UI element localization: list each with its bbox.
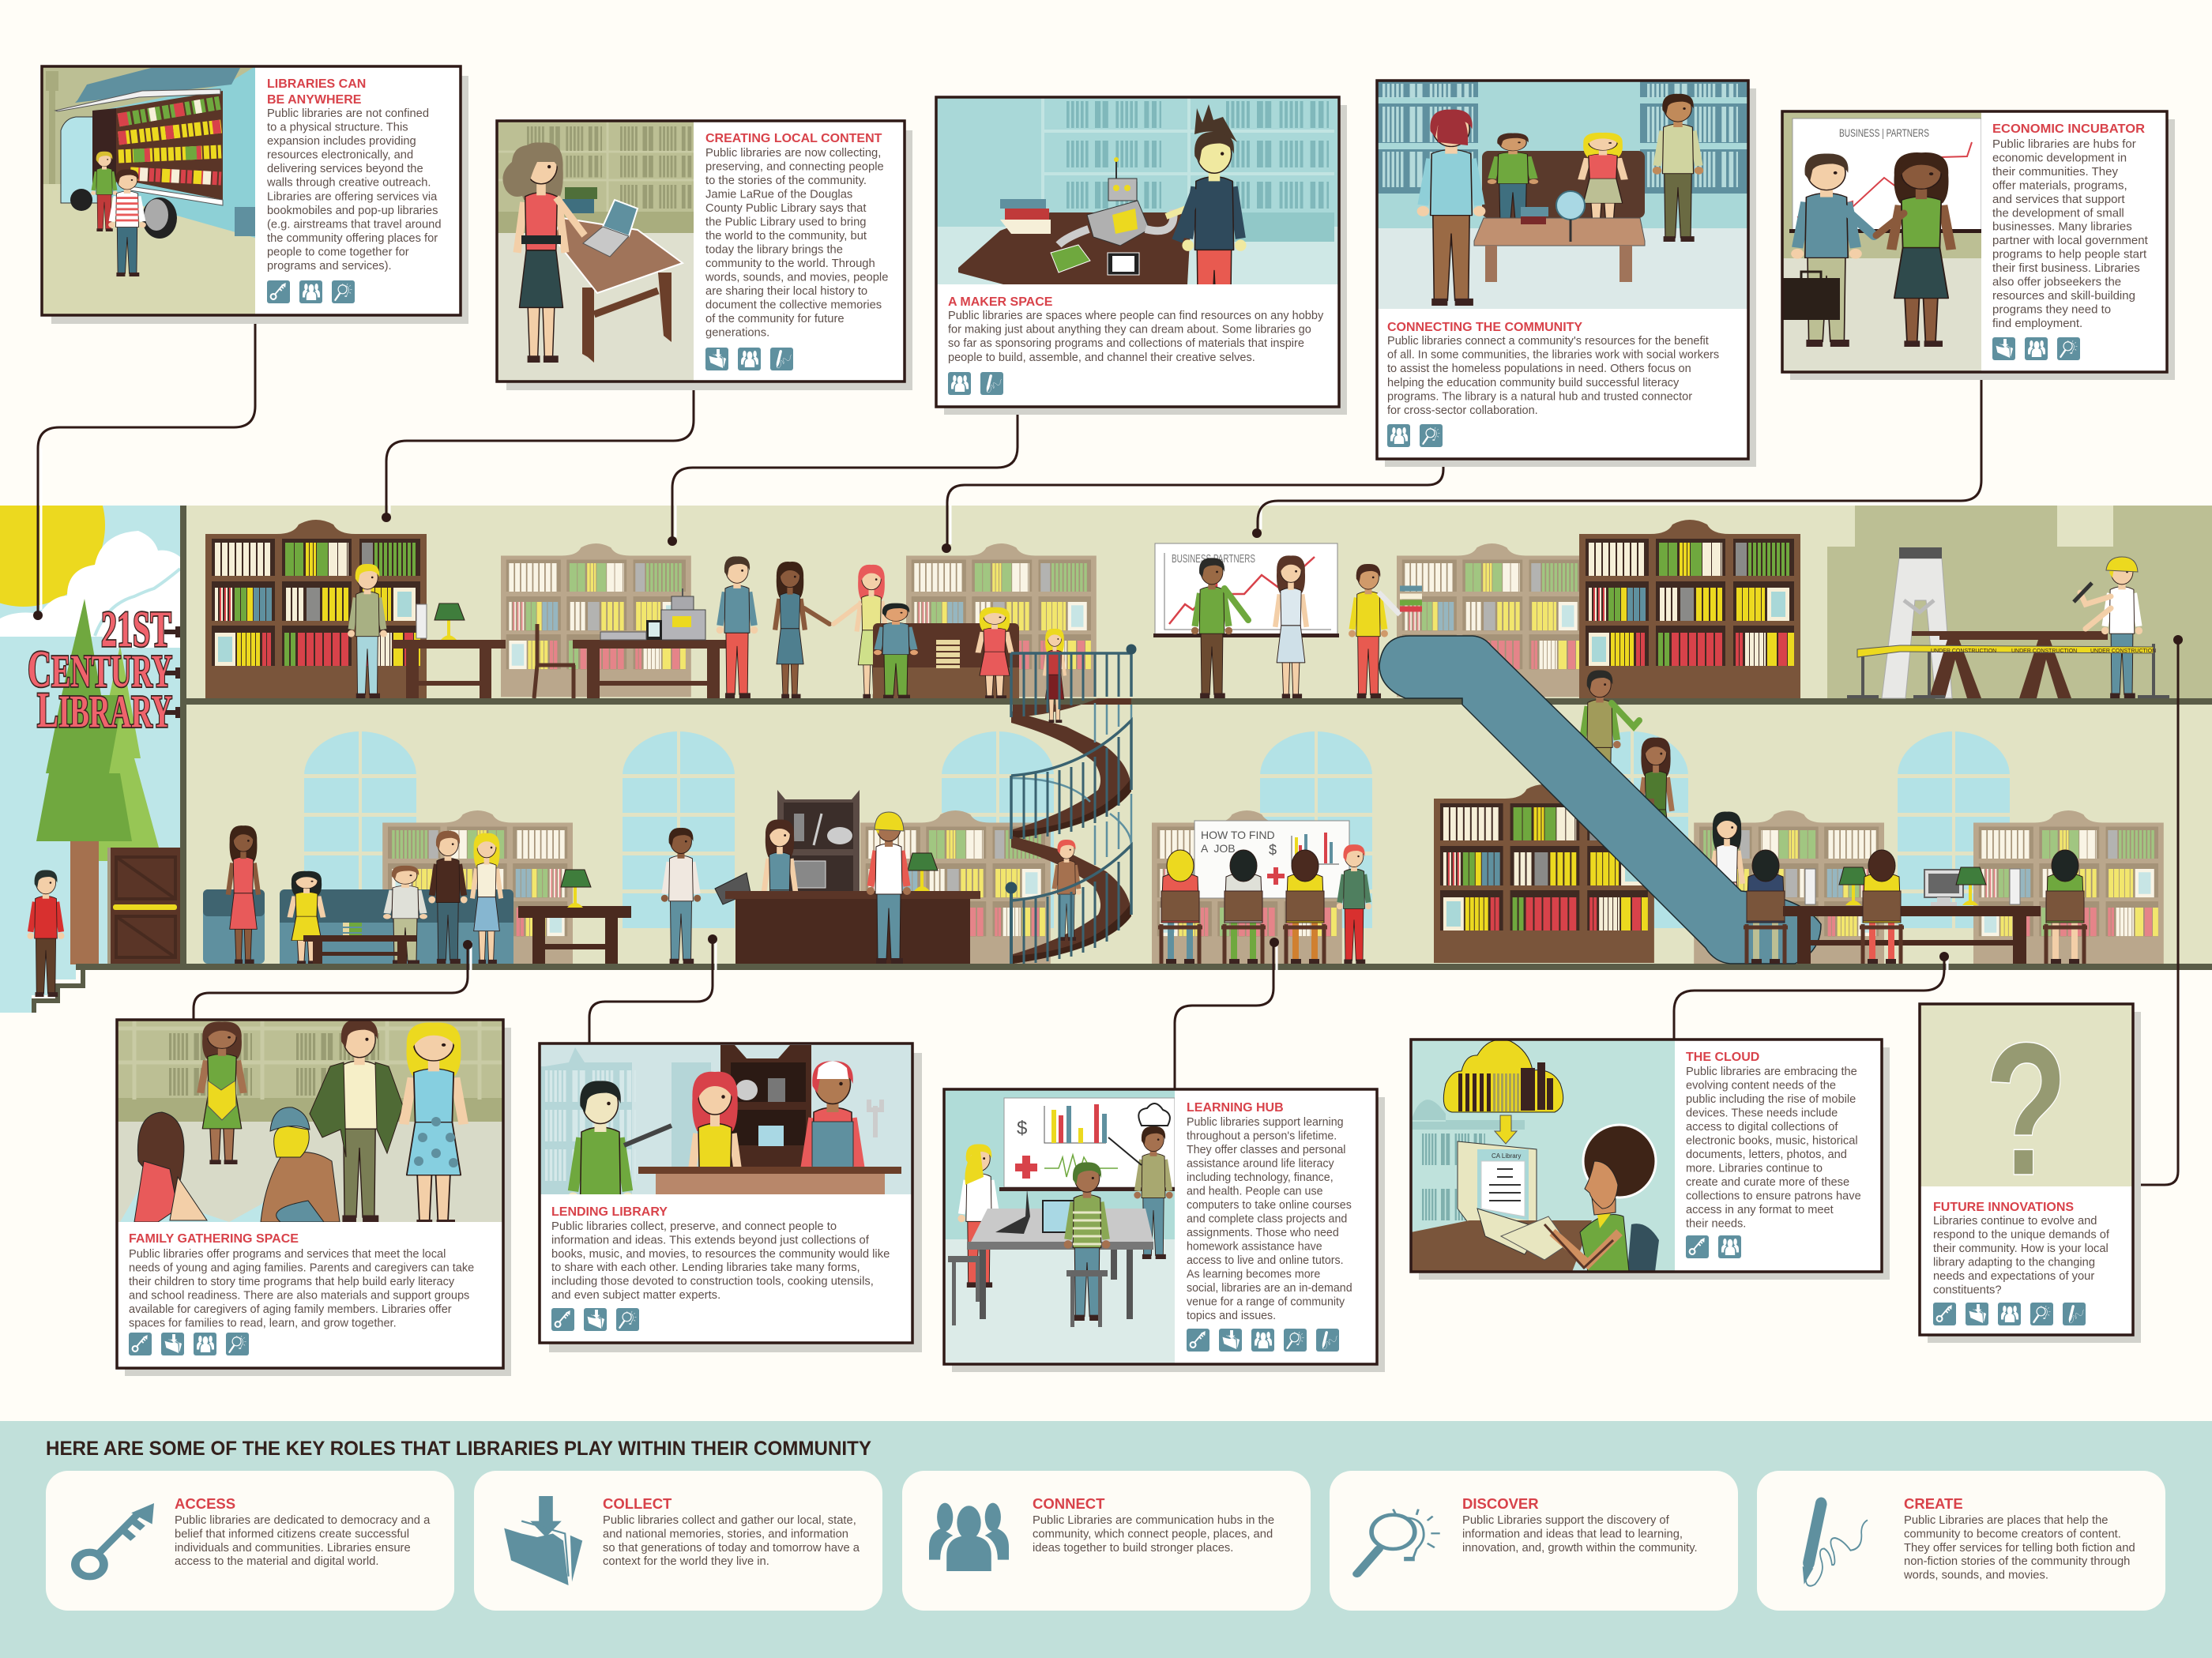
escalator: [1379, 636, 1821, 964]
role icons: [1187, 1329, 1339, 1352]
floors and left wall: [76, 506, 2212, 970]
body text: available for caregivers of aging family members. Libraries offer: [129, 1303, 452, 1316]
card text: ideas together to build stronger places.: [1033, 1542, 1233, 1555]
entrance steps: [34, 970, 83, 1013]
connector: libraries can be anywhere: [33, 315, 255, 620]
classroom: whiteboard: A JOB: [1201, 842, 1236, 855]
heading: A MAKER SPACE: [948, 295, 1053, 309]
body text: Public libraries collect, preserve, and connect people to: [551, 1220, 837, 1233]
icon: discover: [2057, 337, 2080, 360]
heading: CREATING LOCAL CONTENT: [705, 132, 882, 145]
card: discover: [1330, 1471, 1738, 1611]
role icons: [551, 1308, 639, 1331]
connector: future innovations: [2133, 635, 2183, 1185]
card heading: ACCESS: [175, 1495, 235, 1512]
body text: throughout a person's lifetime.: [1187, 1130, 1337, 1143]
body text: access to digital collections of: [1686, 1121, 1838, 1134]
body text: Public libraries are spaces where people can find resources on any hobby: [948, 310, 1324, 322]
body text: Public libraries are embracing the: [1686, 1066, 1857, 1078]
classroom: whiteboard: HOW TO FIND: [1201, 829, 1275, 841]
reading woman: [228, 825, 258, 964]
construction area: ladder, table, tape, worker: [1847, 547, 2169, 698]
heading: FUTURE INNOVATIONS: [1933, 1201, 2074, 1214]
body text: They offer classes and personal: [1187, 1144, 1345, 1156]
icon: folder: [504, 1496, 582, 1585]
body text: programs they need to: [1992, 303, 2111, 316]
illustration: business handshake: BUSINESS | PARTNERS: [1839, 126, 1929, 139]
card text: so that generations of today and tomorrow have a: [603, 1542, 860, 1555]
body text: assistance around life literacy: [1187, 1157, 1334, 1171]
body text: walls through creative outreach.: [266, 177, 431, 190]
heading: BE ANYWHERE: [267, 93, 362, 107]
body text: of the community for future: [705, 313, 845, 325]
connector: family gathering space: [194, 940, 472, 1020]
card text: community to become creators of content.: [1904, 1528, 2121, 1540]
icon: connect: [299, 280, 322, 303]
woman shaking hands: [1275, 555, 1307, 698]
card text: non-fiction stories of the community through: [1904, 1555, 2130, 1568]
dark shelf lower floor: [1434, 784, 1654, 963]
man in green jacket: [1191, 558, 1232, 698]
heading: CONNECTING THE COMMUNITY: [1387, 321, 1582, 334]
icon: discover: [1284, 1329, 1307, 1352]
person climbing steps: [27, 870, 65, 997]
boy with book stack: [1349, 564, 1422, 698]
body text: and services that support: [1992, 193, 2125, 206]
illustration: classroom with laptops: [945, 1090, 1175, 1363]
icon: access: [551, 1308, 574, 1331]
icon: access: [1187, 1329, 1209, 1352]
body text: (e.g. airstreams that travel around: [267, 218, 442, 231]
icon: pen: [1803, 1504, 1868, 1586]
body text: assignments. Those who need: [1187, 1227, 1339, 1239]
role icons: [948, 372, 1003, 395]
role icons: [129, 1333, 249, 1355]
card heading: CONNECT: [1033, 1495, 1105, 1512]
body text: respond to the unique demands of: [1933, 1228, 2110, 1242]
panel: libraries can be anywhere: [42, 66, 468, 324]
illustration: family reading together: [118, 1021, 502, 1222]
icon: access: [267, 280, 290, 303]
body text: computers to take online courses: [1187, 1199, 1352, 1212]
body text: documents, letters, photos, and: [1686, 1149, 1847, 1161]
whiteboard: business partners: [1153, 543, 1339, 637]
body text: are sharing their local history to: [705, 285, 867, 298]
body text: access in any format to meet: [1686, 1204, 1834, 1216]
body text: including technology, finance,: [1187, 1171, 1334, 1184]
riders behind escalator: [1578, 671, 1743, 956]
icon: collect: [1992, 337, 2015, 360]
card text: Public Libraries support the discovery of: [1462, 1514, 1670, 1527]
panel: family gathering space: [117, 1019, 511, 1376]
body text: programs and services).: [267, 260, 392, 273]
body text: for cross-sector collaboration.: [1387, 404, 1538, 417]
icon: connect: [1387, 424, 1410, 447]
icon: discover: [616, 1308, 639, 1331]
title: 21st Century Library: 21ST: [101, 601, 171, 658]
body text: Public libraries are now collecting,: [705, 147, 881, 160]
man at computer: [348, 564, 387, 698]
heading: THE CLOUD: [1686, 1051, 1759, 1064]
role icons: [1992, 337, 2080, 360]
child on stairs, upper: [1044, 629, 1065, 723]
card text: Public libraries collect and gather our local, state,: [603, 1514, 856, 1527]
body text: and health. People can use: [1187, 1185, 1322, 1198]
illustration: lending counter: [540, 1044, 912, 1194]
title: 21st Century Library: [28, 601, 180, 738]
seated boy: [383, 866, 427, 964]
body text: and school readiness. There are also materials and support groups: [129, 1289, 469, 1303]
icon: create: [980, 372, 1003, 395]
connector: maker space: [668, 407, 1018, 546]
icon: connect: [194, 1333, 216, 1355]
icon: discover: [2030, 1303, 2053, 1325]
body text: including those devoted to construction tools, cooking utensils,: [551, 1276, 874, 1288]
body text: people to come together for: [267, 246, 409, 259]
panel: learning hub: [944, 1089, 1385, 1372]
body text: evolving content needs of the: [1686, 1079, 1836, 1092]
body text: to the stories of the community.: [705, 175, 867, 187]
body text: also offer jobseekers the: [1992, 275, 2121, 288]
computer table with patrons: [1744, 850, 2087, 964]
role icons: [705, 348, 793, 370]
tool cabinet: [777, 790, 860, 891]
body text: document the collective memories: [705, 299, 882, 312]
body text: partner with local government: [1992, 234, 2149, 247]
body text: preserving, and connecting people: [705, 160, 884, 174]
band heading: HERE ARE SOME OF THE KEY ROLES THAT LIBRARIES PLAY WITHIN THEIR COMMUNITY: [46, 1438, 871, 1460]
connector: the cloud: [1674, 952, 1949, 1040]
heading: LEARNING HUB: [1187, 1101, 1284, 1115]
role icons: [1933, 1303, 2086, 1325]
panel: lending library: [540, 1043, 922, 1352]
construction area: ladder, table, tape, worker: UNDER CONSTRUCTION: [1931, 649, 1996, 654]
body text: access to live and online tutors.: [1187, 1254, 1344, 1267]
body text: Libraries are offering services via: [267, 190, 438, 203]
role icons: [1387, 424, 1443, 447]
body text: find employment.: [1992, 317, 2082, 330]
card: connect: [902, 1471, 1311, 1611]
body text: Public libraries connect a community's resources for the benefit: [1387, 335, 1709, 348]
body text: constituents?: [1933, 1284, 2002, 1297]
role icons: [1686, 1235, 1741, 1258]
upper bookshelves: [205, 520, 1800, 698]
body text: Public libraries offer programs and services that meet the local: [129, 1248, 446, 1261]
body text: offer materials, programs,: [1992, 179, 2127, 192]
whiteboard: business partners: BUSINESS PARTNERS: [1172, 552, 1255, 566]
panel: creating local content: [497, 121, 912, 390]
laptop handed over: [715, 873, 750, 904]
panel: connecting the community: [1377, 81, 1756, 467]
body text: generations.: [705, 326, 769, 340]
icon: collect: [705, 348, 728, 370]
body text: the development of small: [1992, 206, 2124, 220]
door: [107, 848, 180, 964]
card text: Public Libraries are communication hubs in the: [1033, 1514, 1274, 1527]
maker table with chair and robot: [534, 588, 733, 698]
lower light bookshelves: [382, 810, 2164, 964]
card text: Public Libraries are places that help the: [1904, 1514, 2108, 1527]
card text: access to the material and digital world.: [175, 1555, 378, 1568]
icon: connect: [1998, 1303, 2021, 1325]
sky with sun and clouds: [0, 506, 180, 1013]
illustration: cloud library and computer: [1413, 1041, 1675, 1270]
card text: and national memories, stories, and information: [603, 1528, 848, 1540]
icon: connect: [2025, 337, 2048, 360]
body text: more. Libraries continue to: [1686, 1162, 1823, 1175]
icon: collect: [161, 1333, 184, 1355]
body text: of all. In some communities, the libraries work with social workers: [1387, 348, 1719, 362]
body text: social, libraries are an in-demand: [1187, 1282, 1352, 1295]
body text: County Public Library says that: [705, 202, 867, 215]
construction area: ladder, table, tape, worker: UNDER CONSTRUCTION: [2090, 649, 2156, 654]
body text: community to the world. Through: [705, 258, 875, 270]
librarian: [764, 819, 796, 964]
icon: create: [1316, 1329, 1339, 1352]
body text: for making just about anything they can dream about. Some libraries go: [948, 323, 1311, 336]
body text: Public libraries are hubs for: [1992, 137, 2136, 151]
body text: electronic books, music, historical: [1686, 1134, 1858, 1148]
body text: economic development in: [1992, 151, 2127, 164]
card text: Public libraries are dedicated to democracy and a: [175, 1514, 431, 1527]
panel: a maker space: [936, 97, 1347, 415]
body text: their needs.: [1686, 1217, 1746, 1231]
body text: Public libraries are not confined: [267, 107, 429, 120]
connector: connecting the community: [942, 459, 1443, 553]
maker man: [717, 556, 758, 698]
card text: They offer services for telling both fiction and: [1904, 1542, 2135, 1555]
heading: FAMILY GATHERING SPACE: [129, 1232, 299, 1246]
body text: and complete class projects and: [1187, 1212, 1347, 1226]
card: create: [1757, 1471, 2165, 1611]
lower floor: seating area: [203, 889, 514, 964]
card: access: [46, 1471, 454, 1611]
woman handing book: [775, 562, 805, 698]
icon: access: [1933, 1303, 1956, 1325]
body text: Jamie LaRue of the Douglas: [705, 188, 852, 201]
illustration: bookmobile: [43, 68, 255, 314]
body text: people to build, assemble, and channel their creative selves.: [948, 352, 1255, 364]
icon: access: [1686, 1235, 1709, 1258]
icon: access: [129, 1333, 152, 1355]
body text: their communities. They: [1992, 165, 2118, 179]
icon: connect: [948, 372, 971, 395]
card text: words, sounds, and movies.: [1903, 1570, 2048, 1582]
heading: ECONOMIC INCUBATOR: [1992, 122, 2145, 136]
body text: to assist the homeless populations in need. Others focus on: [1387, 363, 1691, 375]
standing man and woman: [428, 831, 501, 964]
body text: so far as sponsoring programs and collections of materials that inspire: [948, 337, 1304, 350]
card heading: DISCOVER: [1462, 1495, 1539, 1512]
illustration: community meeting on sofa: [1378, 82, 1747, 309]
card text: community, which connect people, places, and: [1033, 1528, 1273, 1540]
building wall: [180, 506, 2212, 964]
body text: to share with each other. Lending libraries take many forms,: [551, 1261, 860, 1274]
panel: the cloud: [1411, 1040, 1890, 1280]
body text: their first business. Libraries: [1992, 261, 2140, 275]
illustration: business handshake: [1784, 112, 1981, 371]
connector: creating local content: [382, 382, 694, 522]
body text: spaces for families to read, learn, and grow together.: [129, 1317, 397, 1330]
side table with lamp: [518, 870, 631, 964]
connector: learning hub: [1175, 938, 1279, 1089]
body text: collections to ensure patrons have: [1686, 1190, 1861, 1203]
body text: their community. How is your local: [1933, 1243, 2109, 1255]
coffee table: [303, 923, 416, 964]
illustration: woman on laptop: [498, 122, 694, 381]
boy returning laptop: [661, 828, 701, 964]
body text: needs and expectations of your: [1933, 1270, 2094, 1283]
body text: Public libraries support learning: [1187, 1116, 1344, 1129]
icon: connect: [738, 348, 761, 370]
icon: discover: [1420, 424, 1443, 447]
icon: create: [2063, 1303, 2086, 1325]
construction worker at desk: [867, 812, 911, 964]
classroom: whiteboard: [1194, 821, 1349, 898]
card text: innovation, and, growth within the community.: [1462, 1542, 1698, 1555]
icon: create: [770, 348, 793, 370]
connector: lending library: [589, 934, 717, 1043]
role icons: [267, 280, 355, 303]
illustration: question mark: ?: [1984, 1004, 2068, 1216]
icon: people: [929, 1503, 1009, 1571]
card: collect: [474, 1471, 882, 1611]
body text: books, music, and movies, to resources the community would like: [551, 1248, 890, 1261]
panel: future innovations: [1920, 1004, 2141, 1343]
card text: individuals and communities. Libraries ensure: [175, 1542, 411, 1555]
body text: bookmobiles and pop-up libraries: [267, 205, 438, 217]
icon: magnifier and bulb: [1357, 1509, 1440, 1573]
title: 21st Century Library: CENTURY: [28, 641, 172, 698]
card heading: COLLECT: [603, 1495, 672, 1512]
class attendees and teacher: [1158, 844, 1371, 964]
lower windows: [304, 731, 2010, 928]
handshake arms: [1224, 588, 1248, 620]
body text: the world to the community, but: [705, 230, 867, 242]
body text: resources and skill-building: [1992, 289, 2135, 303]
body text: expansion includes providing: [267, 135, 416, 148]
connector: economic incubator: [1252, 372, 1981, 538]
icon: discover: [226, 1333, 249, 1355]
body text: information and ideas. This extends beyond just collections of: [551, 1234, 870, 1246]
body text: public including the rise of mobile: [1686, 1093, 1856, 1106]
body text: create and curate more of these: [1686, 1176, 1849, 1189]
trees: [36, 599, 159, 964]
card text: context for the world they live in.: [603, 1555, 769, 1568]
sofa with two seated readers: [873, 603, 1019, 698]
construction area: ladder, table, tape, worker: UNDER CONSTRUCTION: [2011, 649, 2077, 654]
body text: the Public Library used to bring: [705, 216, 867, 229]
classroom: whiteboard: $: [1269, 842, 1277, 858]
body text: to a physical structure. This: [267, 121, 408, 134]
bottom band: key roles: [0, 1421, 2212, 1658]
icon: collect: [584, 1308, 607, 1331]
body text: programs. The library is a natural hub and trusted connector: [1387, 390, 1692, 403]
body text: As learning becomes more: [1187, 1268, 1320, 1281]
card heading: CREATE: [1904, 1495, 1963, 1512]
icon: discover: [332, 280, 355, 303]
body text: devices. These needs include: [1686, 1107, 1838, 1120]
body text: programs to help people start: [1992, 248, 2147, 261]
body text: resources electronically, and: [267, 149, 413, 162]
child on stairs, lower: [1051, 840, 1082, 941]
body text: the community offering places for: [267, 232, 438, 245]
icon: collect: [1966, 1303, 1988, 1325]
title: 21st Century Library: LIBRARY: [37, 682, 172, 738]
red-haired woman: [804, 565, 886, 698]
icon: connect: [1718, 1235, 1741, 1258]
spiral staircase railings: [1005, 645, 1136, 964]
scene: library building cross-section: [0, 444, 2212, 1013]
heading: LENDING LIBRARY: [551, 1205, 668, 1219]
body text: needs of young and aging families. Parents and caregivers can take: [129, 1261, 474, 1275]
body text: and even subject matter experts.: [551, 1289, 720, 1302]
illustration: classroom with laptops: $: [1017, 1118, 1027, 1139]
icon: collect: [1219, 1329, 1242, 1352]
body text: businesses. Many libraries: [1992, 220, 2132, 234]
body text: helping the education community build successful literacy: [1387, 377, 1680, 389]
body text: Libraries continue to evolve and: [1933, 1215, 2097, 1228]
spiral staircase treads: [1011, 698, 1131, 964]
body text: their children to story time programs that help build early literacy: [129, 1276, 455, 1288]
body text: homework assistance have: [1187, 1240, 1322, 1254]
construction area wall: [1827, 506, 2212, 698]
seated girl: [290, 871, 323, 964]
card text: belief that informed citizens create successful: [175, 1528, 409, 1540]
heading: LIBRARIES CAN: [267, 77, 366, 91]
librarian desk: [725, 853, 980, 964]
body text: delivering services beyond the: [267, 163, 423, 175]
illustration: maker with robot: [937, 98, 1338, 284]
panel: economic incubator: [1782, 111, 2175, 380]
icon: connect: [1251, 1329, 1274, 1352]
body text: venue for a range of community: [1187, 1295, 1345, 1309]
body text: topics and issues.: [1187, 1310, 1276, 1322]
body text: library adapting to the changing: [1933, 1256, 2095, 1269]
upper floor: computer desk and lamp: [392, 603, 506, 698]
body text: today the library brings the: [705, 243, 843, 257]
body text: words, sounds, and movies, people: [705, 271, 888, 284]
icon: key: [75, 1503, 154, 1577]
card text: information and ideas that lead to learning,: [1462, 1528, 1683, 1540]
illustration: cloud library and computer: CA Library: [1492, 1152, 1521, 1160]
